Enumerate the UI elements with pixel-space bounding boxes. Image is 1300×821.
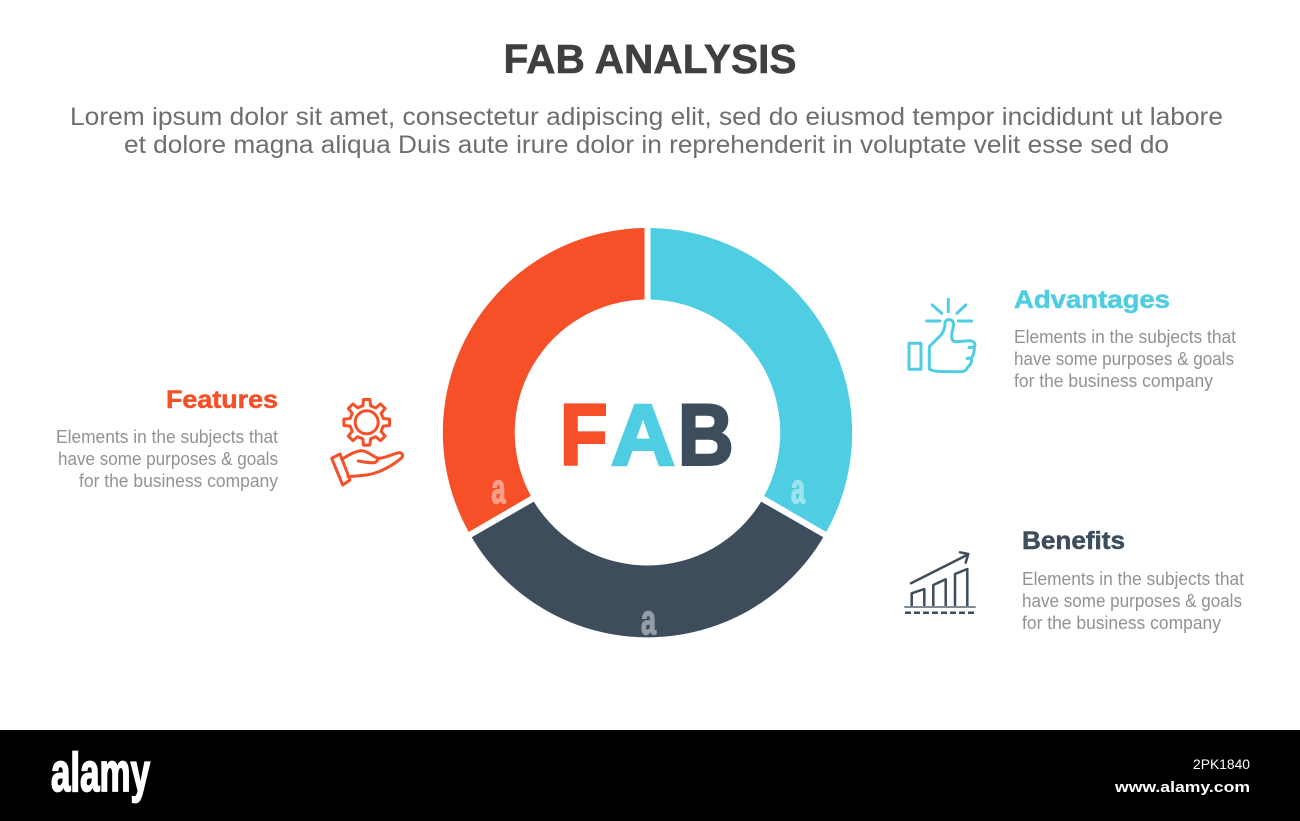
text block: features <box>56 427 278 491</box>
center label FAB: A <box>611 388 675 484</box>
subtitle text: Lorem ipsum dolor sit amet, consectetur adipiscing elit, sed do eiusmod tempor incididunt ut labore <box>70 103 1223 131</box>
text block: advantages: Elements in the subjects that <box>1014 327 1236 347</box>
watermark glyphs <box>492 465 805 643</box>
subtitle text <box>70 103 1223 159</box>
panel: benefits <box>905 527 1244 633</box>
center label FAB: F <box>560 388 608 484</box>
watermark glyphs: a <box>641 596 656 643</box>
donut chart <box>443 228 852 643</box>
image id: 2PK1840 <box>1193 756 1250 772</box>
center label FAB: B <box>678 388 734 484</box>
watermark glyphs: a <box>492 465 506 512</box>
text block: features: for the business company <box>79 471 278 491</box>
title: FAB ANALYSIS <box>504 36 796 82</box>
text block: features: have some purposes & goals <box>58 449 278 469</box>
text block: benefits: for the business company <box>1022 613 1221 633</box>
icon: gear in hand <box>332 400 403 485</box>
center label FAB <box>560 388 734 484</box>
text block: advantages: for the business company <box>1014 371 1213 391</box>
footer band <box>0 730 1300 821</box>
text block: features: Elements in the subjects that <box>56 427 278 447</box>
heading: features: Features <box>166 386 278 414</box>
watermark logo: alamy <box>51 741 150 803</box>
text block: benefits: Elements in the subjects that <box>1022 569 1244 589</box>
icon: thumbs up <box>909 299 975 372</box>
text block: advantages: have some purposes & goals <box>1014 349 1234 369</box>
segment: benefits <box>472 502 823 637</box>
segment: features <box>443 228 644 532</box>
text block: advantages <box>1014 327 1236 391</box>
panel: advantages <box>909 286 1236 391</box>
panel: features <box>56 386 403 491</box>
text block: benefits: have some purposes & goals <box>1022 591 1242 611</box>
icon: growth chart <box>905 552 975 613</box>
site url: www.alamy.com <box>1114 779 1250 796</box>
segment: advantages <box>650 228 852 532</box>
heading: advantages: Advantages <box>1014 286 1170 314</box>
text block: benefits <box>1022 569 1244 633</box>
watermark glyphs: a <box>791 465 805 512</box>
heading: benefits: Benefits <box>1022 527 1125 555</box>
subtitle text: et dolore magna aliqua Duis aute irure dolor in reprehenderit in voluptate velit esse sed do <box>124 131 1169 159</box>
